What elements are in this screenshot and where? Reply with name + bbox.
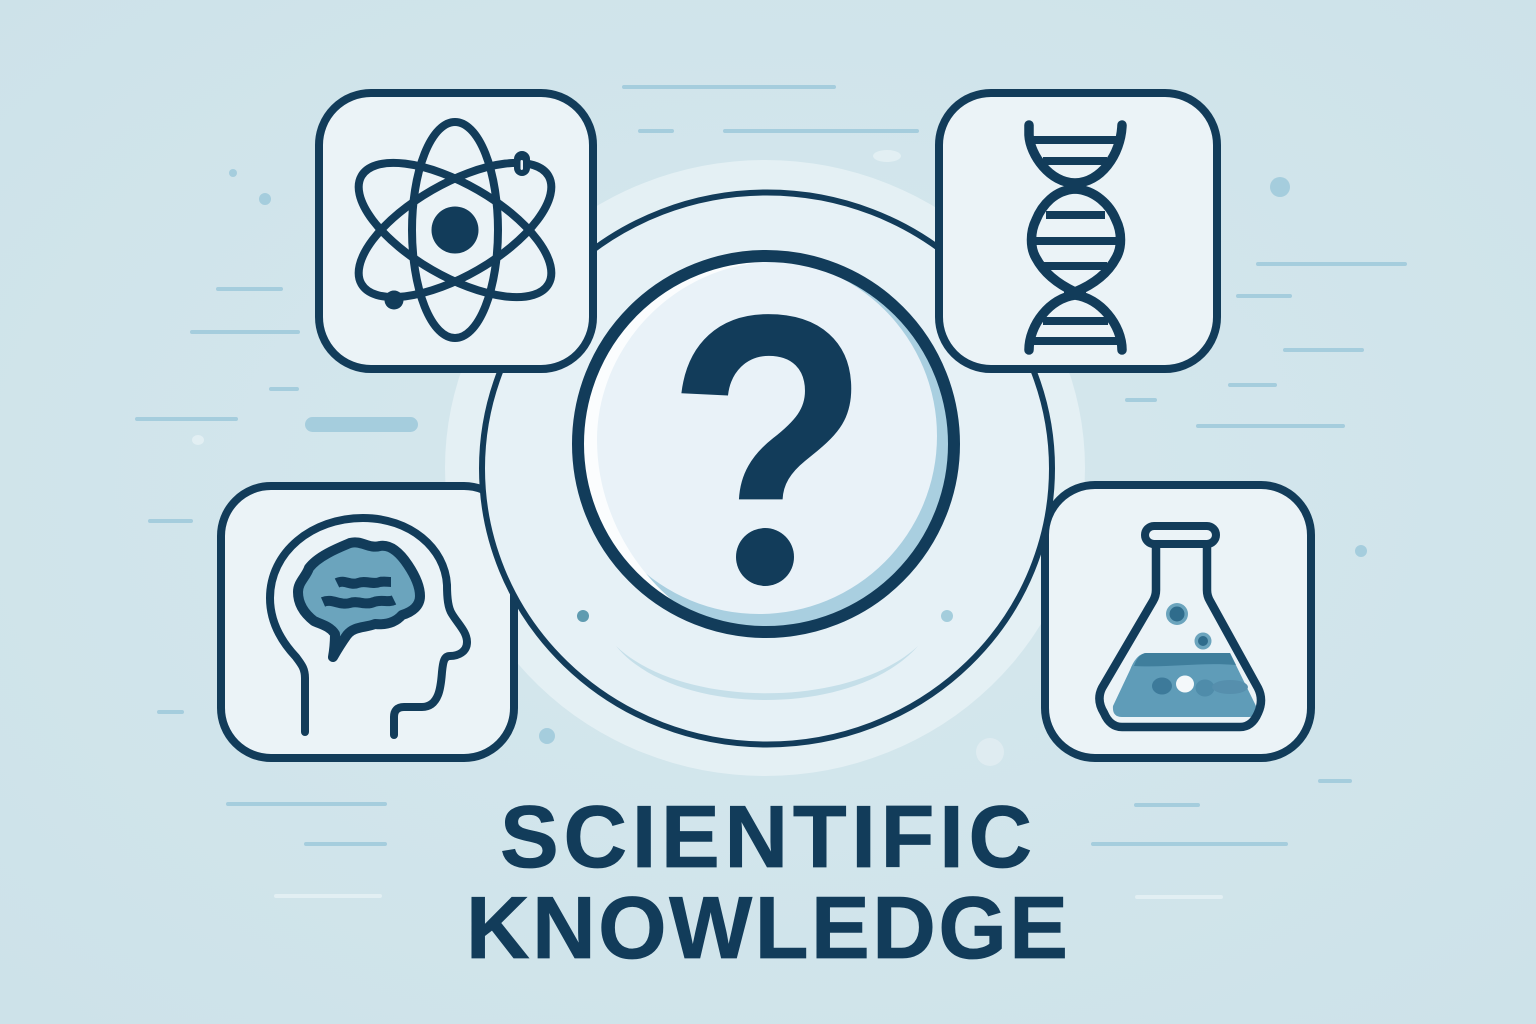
icon: DNA strands <box>1029 125 1122 350</box>
question mark <box>681 314 852 586</box>
icon: electrons <box>384 151 530 310</box>
panel: DNA <box>939 93 1217 369</box>
infographic canvas <box>135 85 1407 960</box>
icon: flask liquid <box>1113 653 1256 717</box>
outer halo <box>445 160 1085 776</box>
panel: atom <box>319 93 593 369</box>
icon: DNA rungs <box>1033 140 1118 341</box>
icon: flask glass <box>1099 545 1261 727</box>
icon: atom nucleus <box>432 206 478 254</box>
title <box>466 787 1068 977</box>
panel: flask <box>1045 485 1311 758</box>
central circle ring <box>482 192 1052 744</box>
title: SCIENTIFIC <box>500 787 1032 886</box>
question mark: ? <box>666 236 871 658</box>
icon: head outline <box>270 518 467 735</box>
accent dots and smile arc <box>577 610 1004 766</box>
inner circle <box>578 256 954 632</box>
icon: brain <box>298 542 420 657</box>
panel: brain in head <box>221 486 514 758</box>
icon: atom orbits <box>338 122 572 338</box>
icon: flask bubbles <box>1152 603 1248 696</box>
question mark dot <box>736 528 794 586</box>
title: KNOWLEDGE <box>466 878 1068 977</box>
